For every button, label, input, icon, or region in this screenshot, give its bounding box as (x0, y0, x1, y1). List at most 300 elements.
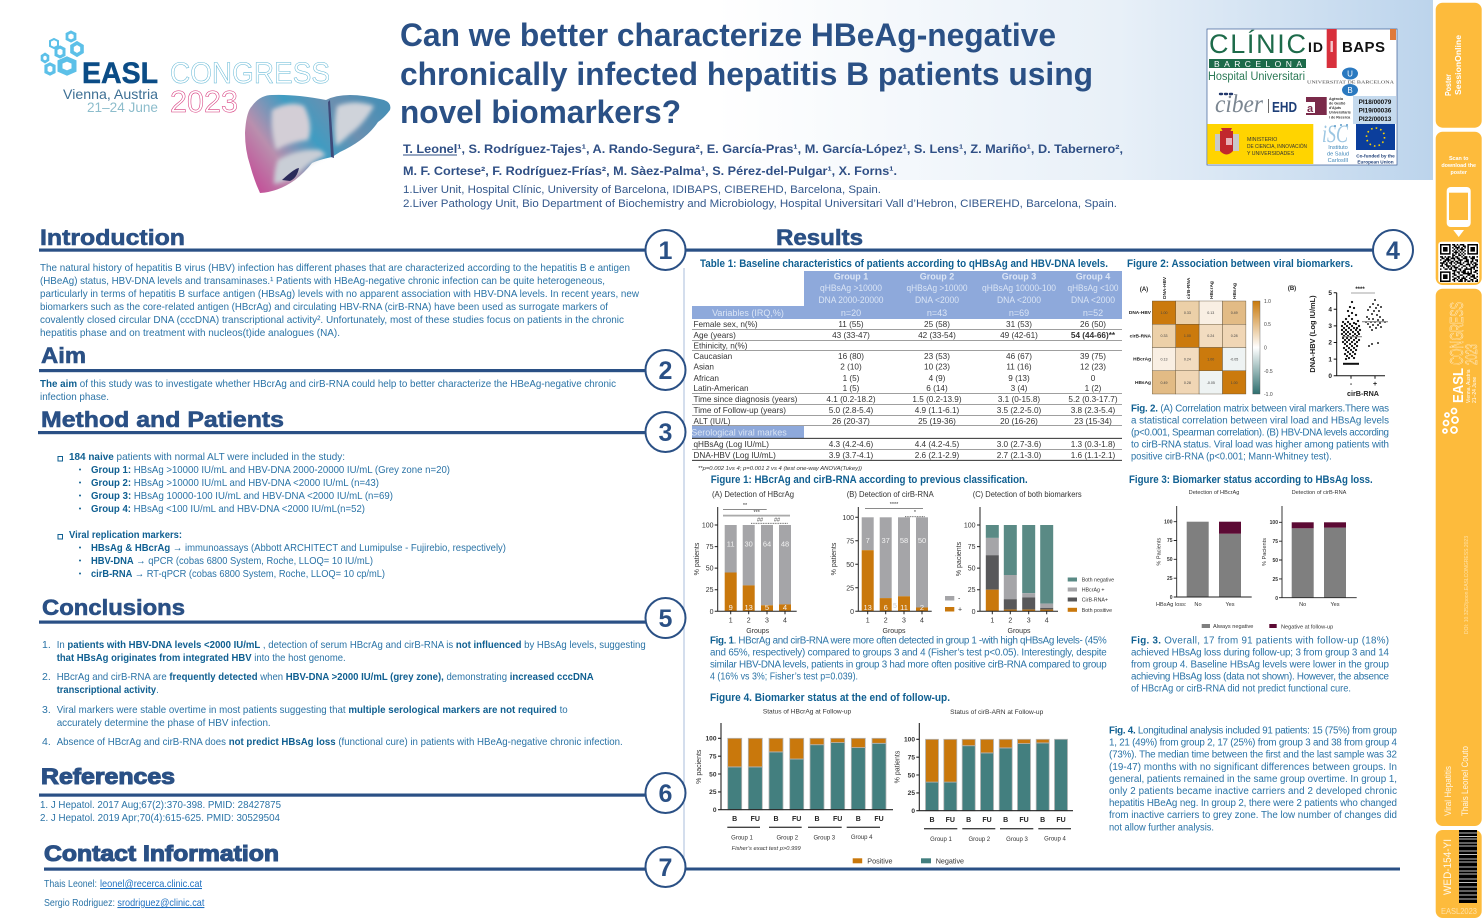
institutional logos block: European Union (1357, 160, 1394, 164)
chart C: detection of both biomarkers: (C) Detection of both biomarkers (973, 490, 1082, 499)
chart: status of cirB-ARN: 0 (911, 808, 915, 815)
chart: cirB-RNA by HBsAg loss: 100 (1270, 520, 1278, 526)
heatmap: correlation matrix: 0.5 (1264, 322, 1271, 328)
chart B: detection of cirB-RNA: 3 (902, 618, 906, 624)
chart C: detection of both biomarkers: Both negative (1082, 578, 1114, 584)
chart B: detection of cirB-RNA: 100 (842, 515, 854, 522)
sidebar: congress and session details: 21–24 June (1472, 377, 1478, 403)
section: Introduction: particularly in terms of hepatitis B surface antigen (HBsAg) levels with no apparent association with HBV-DNA levels. In recent years, new (40, 288, 639, 300)
section: Method and Patients: HBV-DNA → qPCR (cobas 6800 System, Roche, LLOQ= 10 IU/mL) (91, 555, 373, 567)
chart: HBcrAg by HBsAg loss (1156, 490, 1252, 608)
table 1: baseline characteristics: 25 (19-36) (918, 417, 956, 426)
chart: status of HBcrAg: Status of HBcrAg at Follow-up (763, 708, 851, 716)
chart: cirB-RNA by HBsAg loss (1262, 490, 1357, 608)
table 1: baseline characteristics: 16 (80) (838, 352, 864, 361)
chart: status of cirB-ARN: Group 2 (968, 837, 991, 843)
chart A: detection of HBcrAg: *** (753, 510, 761, 516)
heatmap: correlation matrix: DNA-HBV (1129, 310, 1152, 316)
sidebar: congress and session details: Thais Leonel Couto (1460, 746, 1471, 816)
chart A: detection of HBcrAg: 5 (765, 603, 769, 612)
table 1: baseline characteristics (691, 258, 1122, 472)
chart: status of cirB-ARN: 25 (908, 790, 915, 797)
section: Conclusions: 2. (42, 671, 51, 683)
number badge 3 (646, 412, 686, 452)
chart B: detection of cirB-RNA: 2 (920, 603, 924, 612)
institutional logos block: CarlosIII (1328, 158, 1349, 164)
chart C: detection of both biomarkers: Both positive (1082, 608, 1112, 614)
table 1: baseline characteristics: 0 (1091, 374, 1096, 383)
table 1: baseline characteristics: Group 3 (1002, 272, 1036, 282)
chart: status of cirB-ARN: % patients (894, 750, 902, 783)
table 1: baseline characteristics: 4 (9) (929, 374, 946, 383)
table 1: baseline characteristics: 20 (16-26) (1000, 417, 1038, 426)
section: Method and Patients: Group 3: HBsAg 10000-100 IU/mL and HBV-DNA <2000 IU/mL (n=69) (91, 490, 393, 502)
institutional logos block: DE CIENCIA, INNOVACIÓN (1247, 143, 1307, 150)
table 1: baseline characteristics: 1.5 (0.2-13.9) (912, 395, 962, 404)
institutional logos block: de Gestió (1329, 102, 1346, 106)
sidebar: congress and session details: 2023 (1462, 344, 1481, 365)
chart B: detection of cirB-RNA: **** (890, 502, 899, 508)
chart: status of HBcrAg: Group 1 (731, 836, 753, 842)
chart: status of HBcrAg: 0 (713, 807, 717, 814)
chart B: detection of cirB-RNA: 25 (846, 585, 854, 592)
section: Method and Patients: 184 naive patients with normal ALT were included in the study: (69, 451, 345, 463)
chart: status of HBcrAg: B (856, 816, 861, 823)
section: Conclusions: 3. (42, 704, 51, 716)
chart: status of cirB-ARN: B (966, 817, 971, 824)
scatter: HBV-DNA by cirB-RNA status: (B) (1288, 286, 1296, 292)
table 1: baseline characteristics: 3 (4) (1011, 384, 1028, 393)
figure 4 legend: Positive (867, 856, 892, 866)
table 1: baseline characteristics: African (694, 374, 719, 383)
table 1: baseline characteristics: 3.0 (2.7-3.6) (997, 440, 1042, 449)
table 1: baseline characteristics: 10 (23) (924, 362, 950, 372)
chart: cirB-RNA by HBsAg loss: 75 (1272, 539, 1278, 545)
table 1: baseline characteristics: DNA-HBV (Log IU/mL) (694, 451, 776, 460)
chart B: detection of cirB-RNA: 75 (846, 538, 854, 545)
chart A: detection of HBcrAg: 30 (745, 540, 753, 548)
chart C: detection of both biomarkers: 75 (968, 544, 976, 551)
chart B: detection of cirB-RNA: 6 (884, 603, 888, 612)
section: Contact Information: Contact Information (44, 841, 279, 866)
table 1: baseline characteristics: Table 1: Baseline characteristics of patients according to qHBsAg and HBV-DNA levels. (700, 258, 1108, 270)
figure 1 caption: and 65%, respectively) compared to groups 3 and 4 (Fisher’s test p<0.05). Interestingly, despite (710, 648, 1107, 658)
chart: cirB-RNA by HBsAg loss: 0 (1275, 596, 1278, 602)
heatmap: correlation matrix: HBcrAg (1209, 281, 1215, 299)
table 1: baseline characteristics: 1 (5) (843, 384, 860, 393)
figure 1 caption: Fig. 1. HBcrAg and cirB-RNA were more often detected in group 1 -with high qHBsAg levels- (45% (710, 636, 1107, 646)
chart A: detection of HBcrAg: 0 (710, 609, 714, 616)
chart: status of cirB-ARN: Group 3 (1006, 837, 1028, 843)
table 1: baseline characteristics: Age (years) (694, 331, 736, 340)
chart A: detection of HBcrAg: ** (743, 503, 748, 509)
chart B: detection of cirB-RNA: 11 (900, 603, 908, 612)
table 1: baseline characteristics: Group 2 (920, 272, 954, 282)
institutional logos block: PI18/00079 (1359, 99, 1392, 106)
table 1: baseline characteristics: 1 (5) (843, 374, 860, 383)
section: Method and Patients: Group 1: HBsAg >10000 IU/mL and HBV-DNA 2000-20000 IU/mL (Grey zone n=20) (91, 464, 450, 476)
section: Introduction: covalently closed circular DNA (cccDNA) transcriptional activity². Unfortunately, most of these studies focus on patients in the chronic (40, 314, 624, 326)
table 1: baseline characteristics: n=43 (927, 308, 947, 318)
figure 3 legend (1202, 624, 1333, 630)
figure 4 caption: Fig. 4. Longitudinal analysis included 91 patients: 15 (75%) from group (1109, 726, 1398, 736)
sidebar: poster code and barcode: EASL2023 (1441, 907, 1478, 916)
table 1: baseline characteristics: Group 4 (1076, 272, 1110, 282)
heatmap: correlation matrix: 0.28 (1231, 334, 1238, 338)
sidebar: poster code and barcode (1436, 830, 1482, 918)
figure 4 caption: hepatitis HBeAg neg. In group 2, there were 2 patients who changed (1109, 798, 1397, 809)
section: Contact Information: srodriguez@clinic.cat (117, 897, 204, 909)
figure 1: HBcrAg and cirB-RNA by group (694, 474, 1114, 682)
chart B: detection of cirB-RNA: + (958, 606, 962, 614)
table 1: baseline characteristics: 49 (42-61) (1000, 331, 1038, 340)
table 1: baseline characteristics: DNA <2000 (915, 295, 959, 305)
section: Contact Information: Thais Leonel: (44, 878, 97, 890)
number badge 1 (646, 230, 686, 270)
figure 4 caption: general, patients remained in the same group overtime. In group 1, (1109, 774, 1397, 785)
chart: HBcrAg by HBsAg loss: Detection of HBcrAg (1189, 490, 1239, 496)
heatmap: correlation matrix: 0.24 (1207, 334, 1214, 338)
institutional logos block: Instituto (1328, 145, 1348, 151)
chart: status of HBcrAg: FU (751, 816, 760, 823)
table 1: baseline characteristics: qHBsAg >10000 (906, 283, 968, 293)
section: Method and Patients (38, 407, 651, 580)
institutional logos block: ciber (1215, 91, 1263, 118)
chart: status of HBcrAg: % pacients (696, 749, 703, 784)
institutional logos block: CLÍNIC (1209, 29, 1306, 59)
chart: status of cirB-ARN: 50 (908, 772, 915, 779)
authors: M. F. Cortese², F. Rodríguez-Frías², M. Sàez-Palma¹, S. Pérez-del-Pulgar¹, X. Forns¹. (403, 164, 897, 178)
chart C: detection of both biomarkers: 0 (972, 609, 976, 616)
section: Introduction: hepatitis phase and on treatment with nucleos(t)ide analogues (NA). (40, 327, 340, 339)
heatmap: correlation matrix: cirB-RNA (1186, 277, 1192, 299)
institutional logos block: UNIVERSITAT DE BARCELONA (1307, 80, 1395, 84)
chart A: detection of HBcrAg: 75 (706, 544, 714, 551)
chart A: detection of HBcrAg: 1 (729, 618, 733, 624)
institutional logos block: PI22/00013 (1359, 116, 1392, 123)
institutional logos block (1207, 29, 1397, 165)
institutional logos block: Universitaris (1329, 110, 1351, 114)
section: Method and Patients: Viral replication markers: (69, 529, 182, 541)
figure 2 caption: Fig. 2. (A) Correlation matrix between viral markers.There was (1131, 404, 1389, 414)
sidebar: congress and session details (1436, 289, 1482, 826)
table 1: baseline characteristics: 4.3 (4.2-4.6) (829, 440, 874, 449)
table 1: baseline characteristics: 42 (33-54) (918, 331, 956, 340)
institutional logos block: Co-funded by the (1356, 154, 1395, 158)
scatter: HBV-DNA by cirB-RNA status: 2 (1328, 340, 1332, 347)
chart: cirB-RNA by HBsAg loss: Yes (1330, 602, 1340, 608)
table 1: baseline characteristics: 12 (23) (1080, 362, 1106, 372)
institutional logos block: Y UNIVERSIDADES (1247, 151, 1295, 157)
number badge 5 (646, 598, 686, 638)
table 1: baseline characteristics: 3.5 (2.2-5.0) (997, 406, 1042, 415)
table 1: baseline characteristics: 25 (58) (924, 320, 950, 329)
heatmap: correlation matrix: 0 (1264, 346, 1267, 352)
section: Conclusions: that HBsAg originates from integrated HBV into the host genome. (57, 652, 346, 664)
figure 4 legend (853, 856, 964, 866)
figure 2 caption: a statistical correlation between viral load and HBsAg levels (1131, 416, 1389, 426)
chart B: detection of cirB-RNA: 5 (893, 603, 897, 610)
table 1: baseline characteristics: 1.6 (1.1-2.1) (1071, 451, 1116, 460)
figure 4 caption: only 2 patients became inactive carriers and 2 developed chronic (1109, 786, 1397, 797)
institutional logos block: ID (1308, 39, 1323, 55)
table 1: baseline characteristics: 43 (33-47) (832, 331, 870, 340)
table 1: baseline characteristics: 4.1 (0.2-18.2) (826, 395, 876, 404)
chart: status of HBcrAg: FU (792, 816, 801, 823)
institutional logos block: i de Recerca (1329, 116, 1351, 120)
chart: status of HBcrAg: 100 (705, 736, 717, 743)
chart A: detection of HBcrAg: ## (774, 518, 781, 524)
chart A: detection of HBcrAg: 11 (727, 540, 735, 548)
sidebar: congress and session details: Vienna, Austria (1466, 369, 1472, 403)
figure 1 caption (710, 636, 1107, 682)
number badge 1: 1 (659, 237, 673, 265)
figure 2 caption (1131, 404, 1389, 462)
section: Conclusions: Absence of HBcrAg and cirB-RNA does not predict HBsAg loss (functional cure) in patients with HBeAg-negative chronic infection. (57, 736, 623, 748)
table 1: baseline characteristics: n=69 (1009, 308, 1029, 318)
sidebar: poster code and barcode: WED-154-YI (1442, 839, 1454, 895)
heatmap: correlation matrix: 1.0 (1264, 299, 1271, 305)
scatter: HBV-DNA by cirB-RNA status (1288, 286, 1388, 398)
institutional logos block: a (1307, 103, 1314, 115)
number badge 3: 3 (659, 419, 672, 447)
section: Results heading: Results (776, 225, 863, 250)
heatmap: correlation matrix: 0.49 (1231, 311, 1238, 315)
chart: status of cirB-ARN: FU (1019, 817, 1029, 824)
table 1: baseline characteristics: qHBsAg <100 (1068, 283, 1118, 293)
chart: status of HBcrAg: B (814, 816, 820, 823)
chart A: detection of HBcrAg: Groups (746, 628, 770, 635)
heatmap: correlation matrix: HBsAg (1135, 380, 1151, 386)
heatmap: correlation matrix: 0.13 (1160, 358, 1168, 362)
chart B: detection of cirB-RNA: * (914, 510, 917, 516)
table 1: baseline characteristics: 23 (15-34) (1074, 417, 1112, 426)
table 1: baseline characteristics: Time since diagnosis (years) (694, 395, 798, 404)
heatmap: correlation matrix: -1.0 (1264, 392, 1273, 398)
section: Method and Patients: Group 2: HBsAg >10000 IU/mL and HBV-DNA <2000 IU/mL (n=43) (91, 477, 379, 489)
sidebar: scan QR: poster (1450, 170, 1468, 176)
chart B: detection of cirB-RNA: 50 (846, 562, 854, 569)
chart: status of HBcrAg: Group 3 (813, 836, 836, 842)
chart A: detection of HBcrAg: 48 (781, 540, 789, 548)
bottom rule (684, 868, 1400, 870)
chart B: detection of cirB-RNA: % patients (831, 542, 838, 575)
chart C: detection of both biomarkers: 1 (990, 618, 994, 624)
chart: status of cirB-ARN: B (1040, 817, 1045, 824)
chart B: detection of cirB-RNA: - (958, 596, 961, 602)
table 1: baseline characteristics: Group 1 (834, 272, 868, 282)
table 1: baseline characteristics: 9 (13) (1008, 374, 1030, 383)
section: References: References (41, 764, 175, 789)
table 1: baseline characteristics: Asian (694, 362, 714, 372)
number badge 7 (646, 847, 686, 887)
section: Conclusions: Viral markers were stable overtime in most patients suggesting that multiple serological markers are not required to (57, 704, 568, 716)
chart: status of HBcrAg: 50 (709, 771, 717, 778)
figure 3 caption: of HBcrAg or cirB-RNA did not predict functional cure. (1131, 684, 1351, 694)
heatmap: correlation matrix: 0.33 (1184, 311, 1191, 315)
table 1: baseline characteristics: Variables (IRQ,%) (712, 308, 784, 318)
scatter: HBV-DNA by cirB-RNA status: cirB-RNA (1347, 389, 1379, 398)
section: Contact Information: leonel@recerca.clinic.cat (100, 878, 202, 890)
chart: cirB-RNA by HBsAg loss: 50 (1272, 558, 1278, 564)
chart: status of cirB-ARN: 75 (908, 754, 915, 762)
chart C: detection of both biomarkers: CirB-RNA+ (1082, 598, 1108, 604)
chart B: detection of cirB-RNA: 7 (866, 536, 870, 545)
section: Conclusions: transcriptional activity. (57, 684, 159, 696)
chart C: detection of both biomarkers: 100 (964, 522, 976, 530)
figure 2: heatmap and scatter: Figure 2: Association between viral biomarkers. (1127, 258, 1353, 270)
chart B: detection of cirB-RNA: Groups (883, 628, 906, 635)
section: Aim: Aim (41, 343, 86, 368)
chart: status of HBcrAg (696, 708, 893, 852)
table 1: baseline characteristics: qHBsAg >10000 (820, 283, 882, 293)
logo: EASL Congress 2023: EASL (82, 57, 158, 90)
section: References: 1. J Hepatol. 2017 Aug;67(2):370-398. PMID: 28427875 (40, 799, 281, 811)
chart A: detection of HBcrAg: 100 (702, 522, 714, 530)
heatmap: correlation matrix: DNA-HBV (1162, 276, 1168, 299)
chart B: detection of cirB-RNA: 1 (866, 618, 870, 624)
scatter: HBV-DNA by cirB-RNA status: + (1373, 381, 1377, 388)
table 1: baseline characteristics: 3.9 (3.7-4.1) (829, 451, 874, 460)
chart C: detection of both biomarkers: HBcrAg + (1082, 588, 1105, 594)
chart B: detection of cirB-RNA (831, 490, 962, 635)
table 1: baseline characteristics: 1.3 (0.3-1.8) (1071, 440, 1116, 449)
heatmap: correlation matrix (1129, 276, 1273, 398)
section: References (39, 764, 651, 824)
table 1: baseline characteristics: 2.7 (2.1-3.0) (997, 451, 1042, 460)
scatter: HBV-DNA by cirB-RNA status: 3 (1328, 323, 1332, 330)
section: Method and Patients: Method and Patients (41, 407, 284, 432)
number badge 4: 4 (1386, 237, 1400, 265)
illustration: liver (245, 95, 390, 193)
section: Introduction (39, 225, 651, 339)
chart A: detection of HBcrAg: 4 (783, 603, 787, 612)
heatmap: correlation matrix: 0.49 (1160, 381, 1168, 385)
section: Aim: infection phase. (40, 391, 109, 403)
chart: HBcrAg by HBsAg loss: % Pacients (1156, 538, 1162, 566)
table 1: baseline characteristics: 1 (2) (1085, 384, 1102, 393)
vertical divider (684, 268, 685, 858)
table 1: baseline characteristics: Latin-American (694, 384, 749, 393)
title: chronically infected hepatitis B patients using (400, 56, 1093, 92)
institutional logos block: Agència (1329, 97, 1344, 101)
table 1: baseline characteristics: ALT (IU/L) (694, 417, 731, 426)
heatmap: correlation matrix: 1.00 (1207, 358, 1214, 362)
chart: HBcrAg by HBsAg loss: No (1194, 602, 1202, 608)
figure 4 caption: not allow further analysis. (1109, 822, 1214, 833)
number badge 5: 5 (659, 605, 673, 633)
figure 4 caption (1109, 726, 1398, 833)
table 1: baseline characteristics: 2 (10) (840, 362, 862, 372)
scatter: HBV-DNA by cirB-RNA status: DNA-HBV (Log IU/mL) (1308, 295, 1317, 373)
table 1: baseline characteristics: 39 (75) (1080, 352, 1106, 361)
section: Introduction: The natural history of hepatitis B virus (HBV) infection has different phases that are characterized according to the hepatitis B e antigen (40, 262, 630, 274)
section: Conclusions: In patients with HBV-DNA levels <2000 IU/mL , detection of serum HBcrAg and cirB-RNA is not influenced by HBsAg levels, suggesting (57, 639, 646, 651)
section: Introduction: (HBeAg) status, HBV-DNA levels and transaminases.¹ Patients with HBeAg-negative chronic infection can be quite heterogeneous, (40, 275, 605, 287)
section: Introduction: Introduction (40, 225, 185, 250)
chart C: detection of both biomarkers: 25 (968, 587, 976, 594)
table 1: baseline characteristics: 3.8 (2.3-5.4) (1071, 406, 1116, 415)
figure 3 caption: achieving HBsAg loss (data not shown). However, the absence (1131, 672, 1390, 682)
chart: status of cirB-ARN: FU (982, 817, 992, 824)
scatter: HBV-DNA by cirB-RNA status: **** (1355, 287, 1365, 293)
table 1: baseline characteristics: Female sex, n(%) (694, 320, 758, 329)
sidebar: scan QR (1436, 132, 1482, 285)
institutional logos block: iSC (1322, 121, 1348, 148)
heatmap: correlation matrix: 0.24 (1184, 358, 1191, 362)
section: Aim (39, 343, 651, 403)
heatmap: correlation matrix: 0.13 (1207, 311, 1214, 315)
figure 4: biomarker status at end of follow-up: Figure 4. Biomarker status at the end of follow-up. (710, 692, 950, 704)
section: Conclusions: HBcrAg and cirB-RNA are frequently detected when HBV-DNA >2000 IU/mL (grey zone), demonstrating increased cccDNA (57, 671, 594, 683)
heatmap: correlation matrix: (A) (1140, 287, 1148, 293)
section: Results heading (686, 225, 1376, 252)
figure 3: biomarker status by HBsAg loss: Figure 3: Biomarker status according to HBsAg loss. (1129, 474, 1373, 486)
table 1: baseline characteristics: n=20 (841, 308, 861, 318)
number badge 2 (646, 350, 686, 390)
chart A: detection of HBcrAg: 4 (783, 618, 787, 624)
section: Conclusions: accurately determine the phase of HBV infection. (57, 717, 271, 729)
figure 3 caption (1131, 636, 1390, 694)
title: novel biomarkers? (400, 94, 681, 130)
chart B: detection of cirB-RNA: 13 (864, 603, 872, 612)
chart B: detection of cirB-RNA: 0 (850, 609, 854, 616)
sidebar: scan QR: Scan to (1449, 156, 1469, 162)
table 1: baseline characteristics: 23 (53) (924, 352, 950, 361)
chart B: detection of cirB-RNA: (B) Detection of cirB-RNA (847, 490, 934, 499)
heatmap: correlation matrix: 0.28 (1184, 381, 1191, 385)
figure 1 caption: similar HBV-DNA levels, patients in group 3 had more often positive cirB-RNA compared to group (710, 660, 1107, 670)
chart: HBcrAg by HBsAg loss: 25 (1167, 576, 1173, 582)
table 1: baseline characteristics: Ethinicity, n(%) (694, 342, 748, 350)
table 1: baseline characteristics: 6 (14) (926, 384, 948, 393)
table 1: baseline characteristics: 54 (44-66)** (1071, 331, 1116, 340)
logo: EASL Congress 2023: 2023 (170, 84, 238, 119)
chart A: detection of HBcrAg: (A) Detection of HBcrAg (712, 490, 794, 499)
table 1: baseline characteristics: 4.9 (1.1-6.1) (915, 406, 960, 415)
heatmap: correlation matrix: 1.00 (1184, 334, 1191, 338)
section: Method and Patients: Group 4: HBsAg <100 IU/mL and HBV-DNA <2000 IU/mL(n=52) (91, 503, 365, 515)
chart C: detection of both biomarkers: % pacients (956, 541, 963, 576)
chart B: detection of cirB-RNA: 37 (882, 536, 890, 545)
table 1: baseline characteristics: DNA 2000-20000 (818, 295, 884, 305)
chart A: detection of HBcrAg: % patients (694, 542, 701, 575)
affiliations: 1.Liver Unit, Hospital Clínic, University of Barcelona, IDIBAPS, CIBEREHD, Barcelona, Spain. (403, 184, 881, 196)
table 1: baseline characteristics: **p=0.002 1vs 4; p=0.001 2 vs 4 (test one-way ANOVA(Tukey)) (698, 466, 862, 472)
chart: status of cirB-ARN: FU (1056, 817, 1066, 824)
chart: status of cirB-ARN: Status of cirB-ARN at Follow-up (950, 709, 1044, 716)
institutional logos block: MINISTERIO (1247, 137, 1277, 143)
affiliations: 2.Liver Pathology Unit, Bio Department of Biochemistry and Microbiology, Hospital Universitari Vall d’Hebron, CIBEREHD, Barcelona, Spain. (403, 198, 1117, 210)
QR code (1438, 242, 1479, 283)
sidebar: Poster Session Online: SessionOnline (1454, 34, 1463, 95)
number badge 2: 2 (659, 357, 672, 385)
chart B: detection of cirB-RNA: 50 (918, 536, 926, 545)
table 1: baseline characteristics: 2.6 (2.1-2.9) (915, 451, 960, 460)
sidebar: Poster Session Online: Poster (1444, 74, 1453, 96)
chart A: detection of HBcrAg: 3 (765, 618, 769, 624)
sidebar: congress and session details: CONGRESS (1447, 302, 1467, 365)
figure 4 caption: (19-47) months with no significant differences between groups. In (1109, 762, 1397, 773)
chart: status of HBcrAg: 75 (709, 754, 717, 760)
figure 3 legend: Negative at follow-up (1281, 624, 1333, 630)
sidebar: congress and session details: DOI: 10.3252/poon.EASLCONGRESS.2023 (1464, 536, 1470, 634)
number badge 6 (646, 773, 686, 813)
institutional logos block: PI19/00036 (1359, 108, 1392, 114)
section: Method and Patients: HBsAg & HBcrAg → immunoassays (Abbott ARCHITECT and Lumipulse - Fujirebio, respectively) (91, 542, 506, 554)
chart C: detection of both biomarkers: 4 (1045, 618, 1049, 624)
section: Conclusions (39, 595, 651, 748)
